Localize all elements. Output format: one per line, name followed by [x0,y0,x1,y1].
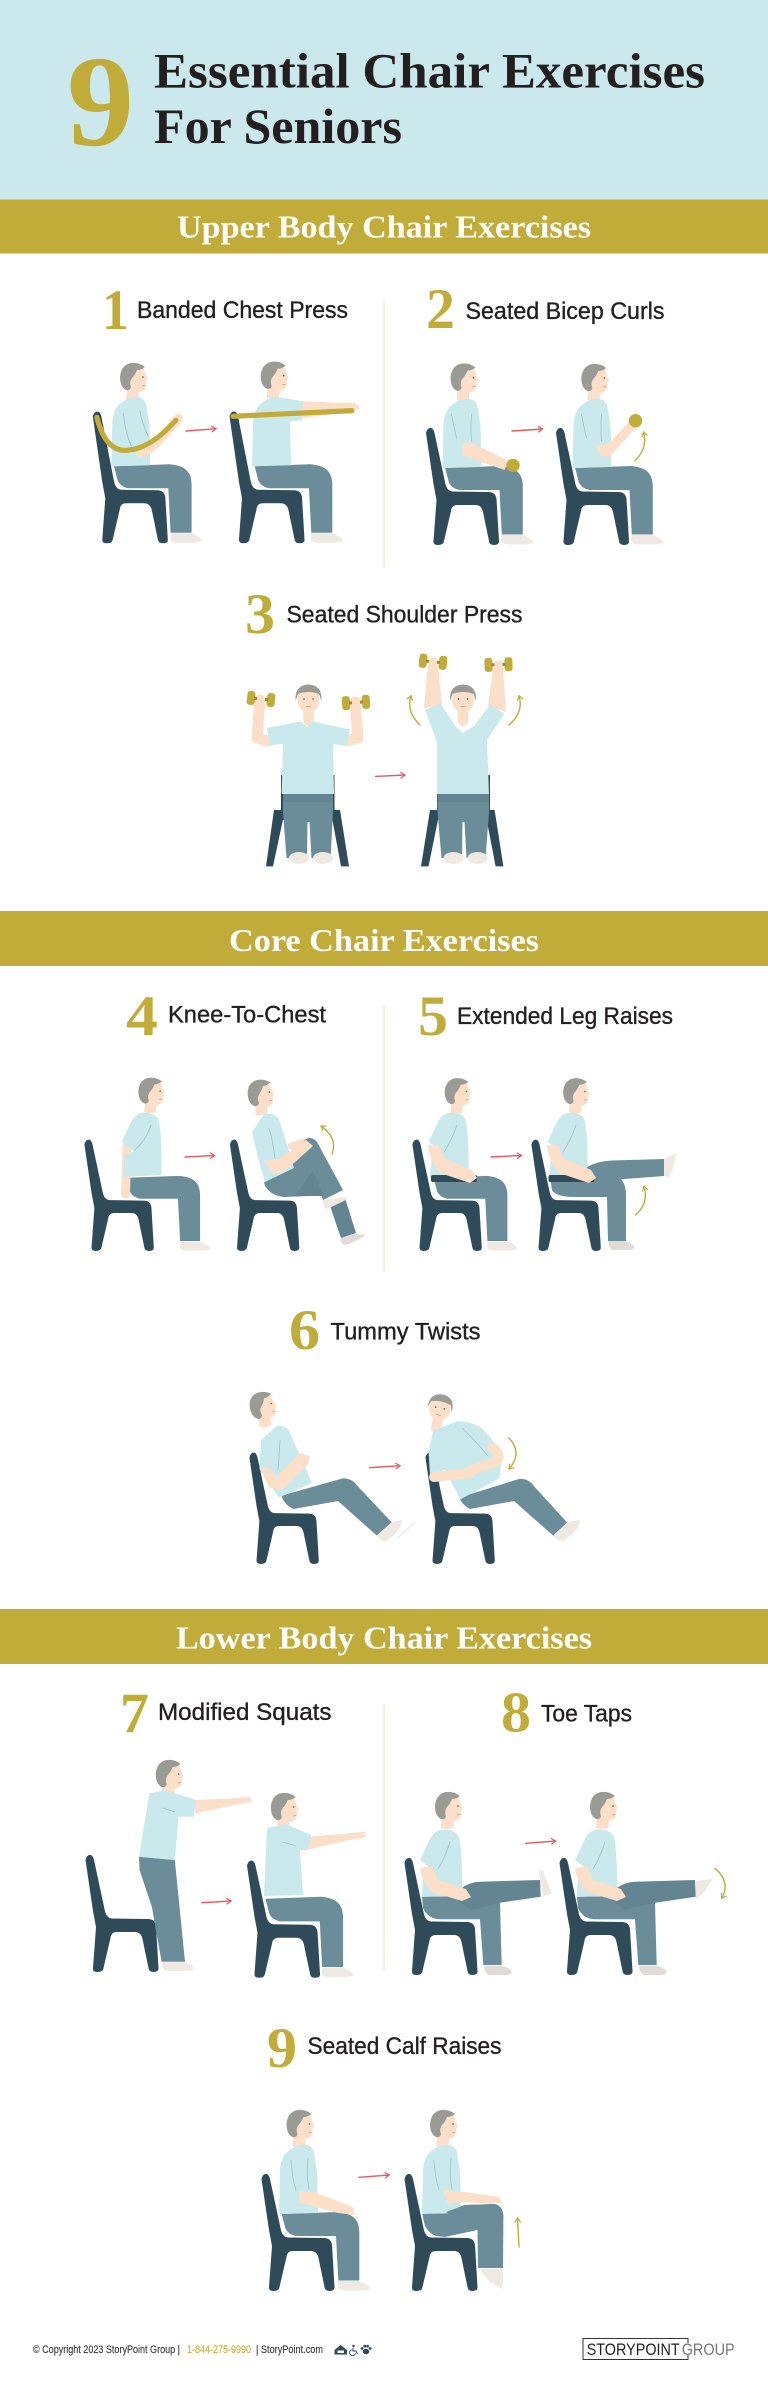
website: | StoryPoint.com [256,2344,323,2356]
exercise 6 label: Tummy Twists [330,1318,480,1346]
figure 7a: standing [86,1760,252,1972]
number 9: 9 [267,2017,297,2080]
figure 5b: leg raised [531,1078,676,1251]
number 6: 6 [289,1299,320,1362]
arrow [370,1466,400,1468]
arrow [185,1155,214,1157]
arrow [491,1155,522,1157]
title line 2: For Seniors [154,98,402,154]
arrow [526,1841,556,1843]
figure 8a: leg out toe up [404,1792,552,1975]
footer [33,2338,735,2360]
figure 4b: knee raised [230,1078,366,1251]
StoryPoint Group logo: STORYPOINT [587,2340,680,2359]
figure 1a: band bent [93,363,202,543]
header panel [0,0,768,200]
figure 2b: arm curled [556,364,664,545]
exercise 3 panel [245,583,522,866]
section heading: lower body: Lower Body Chair Exercises [176,1620,592,1656]
number 3: 3 [245,583,275,646]
exercise 5 label: Extended Leg Raises [457,1003,673,1030]
figure 8b: leg out toe down [560,1792,713,1975]
exercise 9 label: Seated Calf Raises [308,2033,502,2060]
exercise 8 label: Toe Taps [541,1701,632,1728]
gold curved arrow [636,1186,645,1215]
gold straight arrow [518,2218,519,2247]
exercise 5 panel [412,985,676,1251]
exercise 7 panel [86,1682,365,1978]
number 8: 8 [501,1682,531,1744]
gold curved arrow [321,1126,334,1154]
number 1: 1 [102,279,129,342]
arrow [512,429,542,431]
gold arrow left [410,696,420,725]
exercise 1 label: Banded Chest Press [137,297,348,324]
title line 1: Essential Chair Exercises [154,42,705,98]
copyright line: © Copyright 2023 StoryPoint Group | [33,2344,180,2356]
StoryPoint Group logo: GROUP [682,2340,735,2359]
gold curved arrow [715,1868,725,1898]
exercise 7 label: Modified Squats [158,1699,332,1726]
StoryPoint Group logo [583,2338,735,2360]
exercise 4 panel [84,985,366,1251]
icons: housing, accessibility, pets [334,2345,372,2356]
figure 7b: seated arms out [247,1793,365,1978]
title [67,30,705,174]
exercise 1 panel [93,279,359,543]
figure 1b: band extended [230,362,359,543]
gold curved arrow [635,432,645,461]
gold arrow right [509,696,520,725]
section heading: upper body: Upper Body Chair Exercises [177,208,591,244]
figure 5a: seated [412,1078,518,1251]
section heading: lower body [0,1609,768,1664]
number 2: 2 [426,278,455,341]
big number 9: 9 [67,30,134,174]
figure 6b: twisted [422,1392,580,1564]
figure 3a: weights at shoulder [246,684,370,866]
exercise 4 label: Knee-To-Chest [168,1002,326,1028]
arrow [359,2175,389,2177]
arrow [202,1901,231,1903]
section heading: core: Core Chair Exercises [229,922,539,958]
arrow [186,429,216,431]
arrow [376,775,405,776]
number 5: 5 [418,985,448,1048]
figure 9b: heel raised [404,2110,503,2291]
number 4: 4 [126,985,158,1048]
exercise 2 panel [426,278,664,545]
figure 4a: seated upright [84,1078,210,1251]
figure 9a: foot flat [262,2110,370,2291]
exercise 9 panel [262,2017,519,2291]
exercise 3 label: Seated Shoulder Press [286,602,522,628]
exercise 8 panel [404,1682,725,1975]
exercise 6 panel [247,1299,580,1564]
number 7: 7 [120,1682,149,1746]
figure 6a: leaning back [247,1389,415,1564]
exercise 2 label: Seated Bicep Curls [466,298,664,325]
phone number: 1-844-275-9990 [187,2344,251,2356]
figure 3b: weights overhead [418,653,513,866]
gold curved arrow [509,1438,516,1469]
section heading: core [0,911,768,966]
figure 2a: arm down [426,363,534,545]
section heading: upper body [0,200,768,254]
